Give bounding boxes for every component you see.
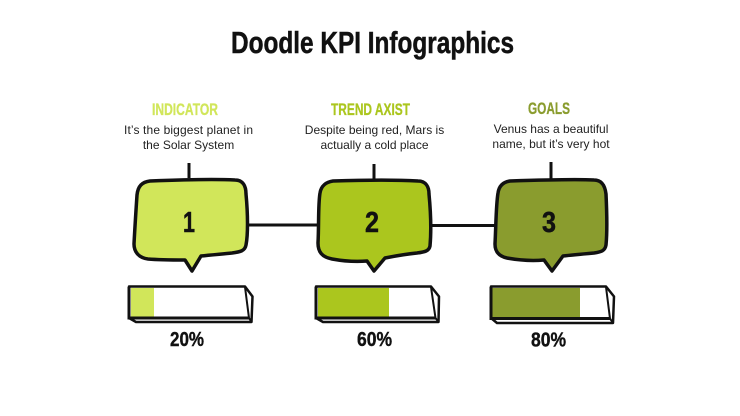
value 80%: 80% bbox=[531, 330, 566, 352]
heading: goals: GOALS bbox=[528, 99, 570, 118]
text block: indicator description: It’s the biggest planet in bbox=[124, 123, 253, 137]
panel: trend axist bbox=[305, 100, 444, 351]
text block: trend axist description: actually a cold place bbox=[320, 138, 429, 152]
title: Doodle KPI Infographics bbox=[231, 25, 514, 60]
value 20%: 20% bbox=[170, 329, 204, 351]
text block: indicator description: the Solar System bbox=[143, 138, 234, 152]
icon: speech bubble 2 bbox=[318, 180, 431, 271]
icon: speech bubble 1 bbox=[134, 180, 248, 271]
panel: goals bbox=[491, 99, 614, 352]
text block: goals description: name, but it’s very hot bbox=[492, 137, 610, 151]
stem bbox=[372, 164, 376, 180]
number 3: 3 bbox=[542, 207, 556, 239]
stem bbox=[188, 163, 190, 178]
panel: indicator bbox=[124, 100, 253, 351]
number 2: 2 bbox=[365, 207, 379, 239]
number 1: 1 bbox=[183, 207, 195, 239]
heading: trend axist: TREND AXIST bbox=[331, 100, 410, 119]
heading: indicator: INDICATOR bbox=[152, 100, 218, 119]
connector: bubble 2 to bubble 3 bbox=[431, 224, 496, 227]
progress bar 20% bbox=[129, 286, 252, 322]
progress bar 60% bbox=[316, 286, 439, 322]
progress bar 80% bbox=[491, 286, 614, 323]
connector: bubble 1 to bubble 2 bbox=[248, 224, 318, 226]
value 60%: 60% bbox=[357, 329, 392, 351]
icon: speech bubble 3 bbox=[495, 180, 607, 271]
text block: goals description: Venus has a beautiful bbox=[494, 122, 608, 136]
stem bbox=[550, 162, 552, 179]
text block: trend axist description: Despite being red, Mars is bbox=[305, 123, 444, 137]
